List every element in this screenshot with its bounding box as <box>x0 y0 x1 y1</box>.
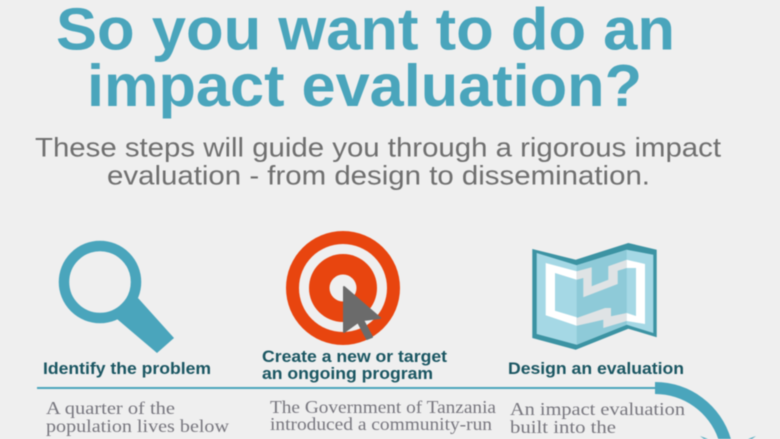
subtitle: evaluation - from design to dissemination. <box>107 160 650 190</box>
subtitle: These steps will guide you through a rigorous impact <box>35 132 722 162</box>
icon: magnifying glass <box>64 246 174 353</box>
text: design an evaluation: An impact evaluation <box>510 399 685 419</box>
icon: target with cursor <box>286 231 400 345</box>
text: create a program <box>270 397 496 434</box>
heading: create a new or target an ongoing program: Create a new or target <box>262 348 448 366</box>
heading: identify the problem: Identify the problem <box>43 360 211 378</box>
text: create a program: The Government of Tanzania <box>270 397 496 417</box>
heading: design an evaluation: Design an evaluation <box>508 360 684 378</box>
text: identify the problem <box>46 398 229 436</box>
title <box>56 0 675 119</box>
text: design an evaluation: built into the <box>510 417 616 437</box>
title: impact evaluation? <box>87 53 642 119</box>
text: identify the problem: A quarter of the <box>46 398 175 418</box>
heading: create a new or target an ongoing program <box>262 348 448 383</box>
timeline arrow <box>37 382 756 439</box>
text: identify the problem: population lives below <box>46 416 229 436</box>
text: create a program: introduced a community-run <box>270 414 492 434</box>
icon: folded map <box>532 243 657 350</box>
subtitle <box>35 132 722 190</box>
heading: create a new or target an ongoing program: an ongoing program <box>262 365 433 383</box>
cursor arrow <box>344 287 380 339</box>
text: design an evaluation <box>510 399 685 437</box>
